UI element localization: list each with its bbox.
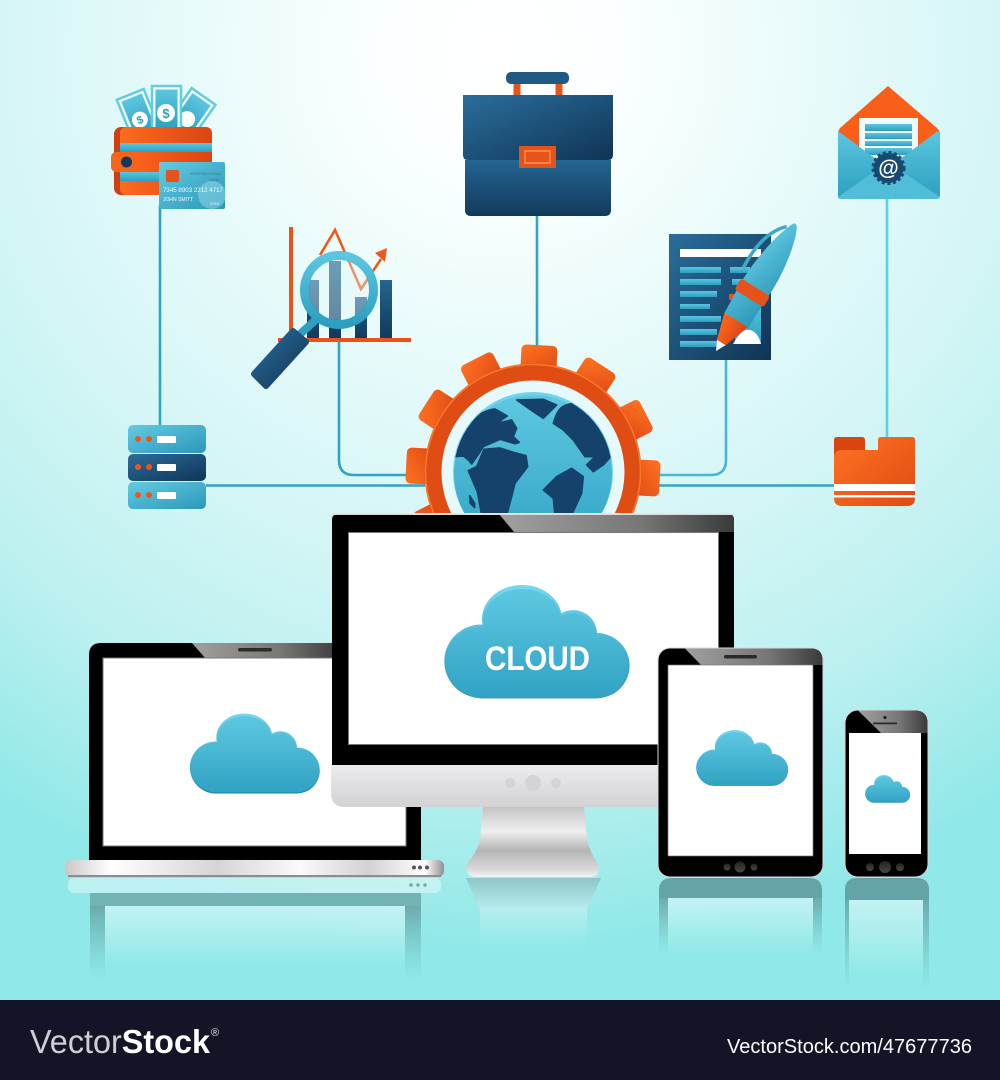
gear teeth bbox=[406, 344, 660, 513]
tablet reflection bbox=[659, 878, 822, 953]
laptop reflection bbox=[68, 878, 441, 980]
icon: email envelope bbox=[838, 86, 940, 199]
banknotes bbox=[117, 86, 215, 142]
device: smartphone bbox=[845, 710, 928, 877]
phone cloud bbox=[865, 775, 910, 803]
trend arrow bbox=[320, 230, 387, 289]
connector lines bbox=[160, 197, 887, 486]
device: desktop monitor bbox=[331, 514, 735, 877]
credit card: INTERNATIONAL bbox=[190, 171, 222, 176]
registered mark: ® bbox=[211, 1027, 219, 1039]
icon: orange folder bbox=[834, 437, 915, 506]
document bbox=[669, 234, 771, 360]
icon: server stack bbox=[128, 425, 206, 509]
image id: VectorStock.com/47677736 bbox=[727, 1036, 972, 1058]
phone buttons bbox=[866, 861, 904, 873]
banknotes: $ bbox=[162, 106, 170, 121]
banknotes: $ bbox=[135, 114, 145, 127]
footer bar bbox=[0, 1000, 1000, 1080]
magnifier bbox=[254, 256, 374, 386]
laptop base bbox=[65, 860, 444, 877]
CLOUD badge bbox=[444, 585, 630, 698]
chart axes bbox=[278, 227, 411, 340]
device: tablet bbox=[658, 648, 823, 877]
credit card bbox=[159, 162, 226, 209]
credit card: 07/18 bbox=[210, 202, 219, 206]
wallet body bbox=[111, 127, 212, 195]
tablet cloud bbox=[696, 730, 788, 786]
gear ring bbox=[424, 364, 642, 513]
icon: document with pen bbox=[669, 212, 810, 360]
phone reflection bbox=[845, 878, 929, 990]
monitor body bbox=[332, 514, 734, 765]
credit card: BANK bbox=[209, 177, 220, 182]
icon: wallet with banknotes and credit card bbox=[111, 86, 226, 209]
icon: magnifier over bar chart bbox=[254, 227, 411, 386]
device: laptop bbox=[65, 643, 444, 877]
credit card: JOHN SMITT bbox=[163, 197, 194, 203]
pen bbox=[698, 212, 810, 360]
tablet buttons bbox=[724, 862, 758, 872]
laptop cloud bbox=[190, 713, 320, 793]
VectorStock logo: VectorStock bbox=[30, 1023, 211, 1060]
@ badge: @ bbox=[878, 157, 899, 180]
monitor chin bbox=[331, 765, 735, 807]
credit card: 7345 8903 2212 4717 bbox=[163, 188, 224, 194]
device reflections on floor bbox=[68, 878, 929, 990]
gear with globe bbox=[406, 344, 660, 513]
letter bbox=[859, 118, 918, 166]
cloud label: CLOUD bbox=[485, 640, 590, 678]
chart bars bbox=[307, 261, 392, 338]
monitor stand reflection bbox=[466, 878, 601, 948]
monitor stand bbox=[466, 807, 599, 877]
globe bbox=[453, 392, 613, 513]
icon: briefcase bbox=[463, 72, 613, 216]
